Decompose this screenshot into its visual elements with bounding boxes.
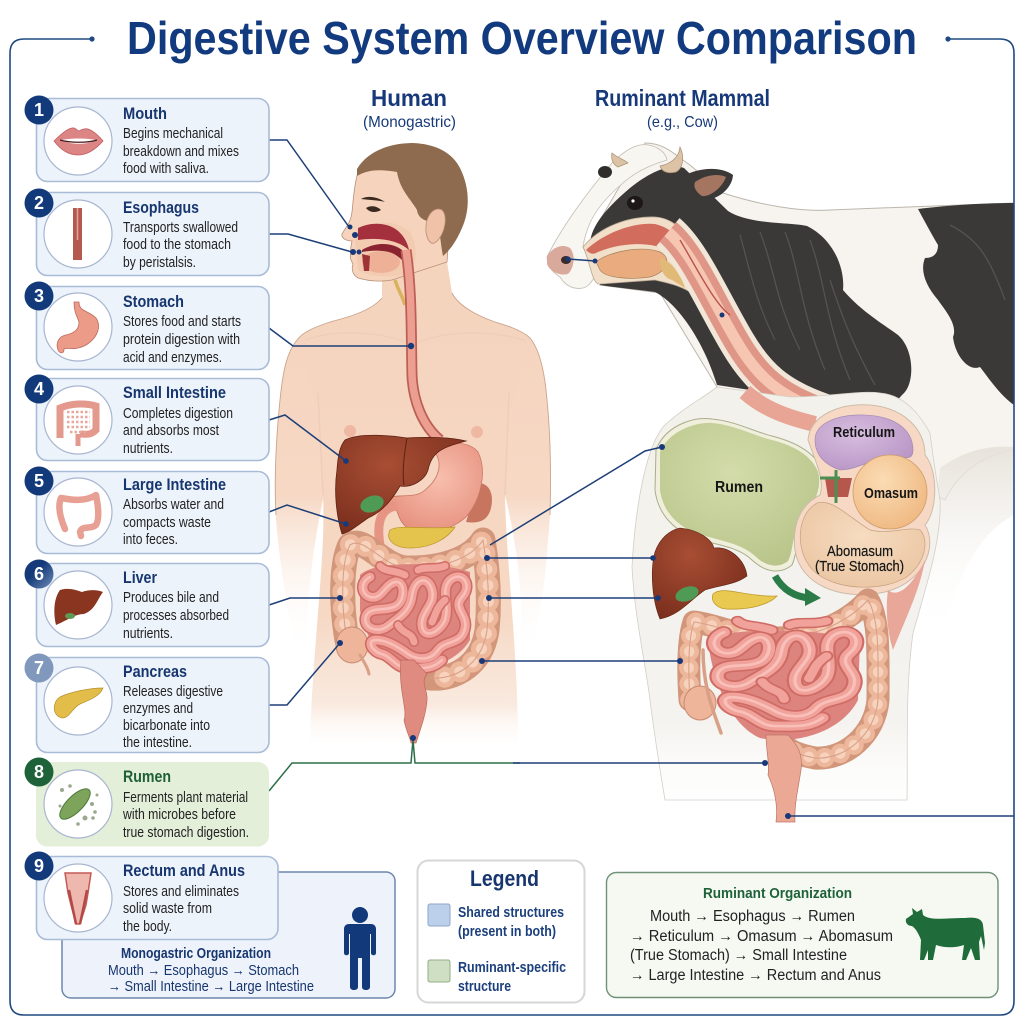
badge 5: 5 bbox=[34, 471, 44, 491]
cow lower liver connector bbox=[489, 597, 658, 599]
badge 9: 9 bbox=[34, 856, 44, 876]
rumen leader extension bbox=[513, 762, 765, 764]
head section bbox=[583, 217, 700, 295]
illustration: human figure bbox=[275, 143, 551, 745]
badge 7 bbox=[24, 654, 54, 682]
ruminant pathway bbox=[630, 908, 893, 984]
left arm bbox=[275, 340, 330, 655]
heading: ruminant bbox=[595, 85, 770, 131]
text: pancreas: enzymes and bbox=[123, 701, 193, 717]
text: rumen bbox=[122, 767, 249, 841]
spleen bbox=[466, 483, 492, 522]
gallbladder bbox=[358, 492, 386, 516]
card: small intestine bbox=[24, 374, 269, 460]
eye and brow bbox=[361, 197, 385, 212]
text: esophagus: Transports swallowed bbox=[123, 220, 238, 236]
hide wrinkles bbox=[740, 225, 1005, 385]
black patch: neck and shoulder bbox=[590, 167, 911, 420]
mouth leader bbox=[269, 140, 349, 227]
icon: stomach bbox=[57, 302, 99, 353]
cow large intestine connector bbox=[482, 660, 680, 662]
small intestine leader bbox=[269, 415, 346, 461]
rumen leader bbox=[269, 740, 520, 791]
icon: pancreas bbox=[54, 688, 103, 718]
badge 4 bbox=[24, 374, 54, 404]
esophagus leader bbox=[269, 234, 352, 252]
oral cavity bbox=[354, 222, 416, 276]
rectum bbox=[400, 660, 427, 743]
pancreas leader bbox=[269, 643, 340, 705]
icon: small intestine bbox=[60, 404, 96, 446]
legend swatch: shared bbox=[428, 904, 450, 926]
cow liver bbox=[652, 528, 747, 619]
ear bbox=[680, 169, 733, 200]
text: rumen: with microbes before bbox=[122, 807, 236, 823]
green flow arrow bbox=[775, 576, 821, 606]
text: large intestine: compacts waste bbox=[123, 515, 211, 531]
text: mouth: food with saliva. bbox=[123, 161, 209, 177]
nose bbox=[547, 246, 574, 275]
small intestine bbox=[360, 564, 470, 669]
badge 6 bbox=[24, 560, 54, 588]
card: esophagus bbox=[24, 188, 269, 276]
small far ear bbox=[598, 166, 612, 178]
ruminant pathway: Mouth → Esophagus → Rumen bbox=[650, 908, 855, 925]
liver bbox=[336, 435, 466, 534]
badge 8: 8 bbox=[34, 762, 44, 782]
icon: microbe bbox=[55, 784, 98, 826]
text: liver: processes absorbed bbox=[123, 608, 229, 624]
heading: ruminant: Ruminant Mammal bbox=[595, 85, 770, 111]
reticulum label: Reticulum bbox=[833, 424, 895, 441]
legend heading: Legend bbox=[470, 866, 539, 891]
monogastric pathway: → Small Intestine → Large Intestine bbox=[108, 978, 314, 995]
cow gallbladder bbox=[673, 583, 701, 605]
rumen bbox=[655, 419, 824, 571]
text: stomach: protein digestion with bbox=[123, 332, 240, 348]
white blaze and muzzle bbox=[547, 145, 667, 288]
ruminant heading: Ruminant Organization bbox=[703, 886, 852, 902]
badge 2 bbox=[24, 188, 54, 218]
text: pancreas: the intestine. bbox=[123, 735, 192, 751]
reticulum bbox=[815, 415, 913, 470]
monogastric pathway: Mouth → Esophagus → Stomach bbox=[108, 962, 299, 979]
cow rumen connector bbox=[490, 447, 662, 545]
omasum bbox=[853, 455, 927, 529]
hind leg fold bbox=[925, 447, 1014, 620]
text: large intestine: into feces. bbox=[123, 532, 178, 548]
text: rectum and anus: solid waste from bbox=[123, 901, 212, 917]
card: liver bbox=[24, 560, 269, 646]
text: large intestine: Large Intestine bbox=[123, 475, 226, 494]
cow mouth connector bbox=[568, 259, 595, 261]
icon: person bbox=[344, 907, 376, 990]
text: small intestine: Completes digestion bbox=[123, 406, 233, 422]
icon: esophagus tube bbox=[73, 208, 82, 260]
text: liver: Liver bbox=[123, 568, 157, 587]
card: rumen bbox=[24, 758, 269, 846]
horns bbox=[612, 147, 683, 173]
text: esophagus: by peristalsis. bbox=[123, 255, 196, 271]
leader lines bbox=[269, 140, 1014, 819]
text: small intestine: and absorbs most bbox=[123, 423, 219, 439]
abomasum: (True Stomach) bbox=[815, 559, 904, 575]
icon: liver bbox=[54, 589, 103, 625]
panel: legend bbox=[418, 860, 584, 1002]
icon: large intestine bbox=[59, 495, 98, 536]
tongue bbox=[596, 249, 667, 278]
body contour and creases bbox=[275, 293, 551, 515]
text: rectum and anus: Stores and eliminates bbox=[123, 884, 239, 900]
legend swatch: ruminant bbox=[428, 960, 450, 982]
badge 8 bbox=[24, 758, 54, 786]
liver leader bbox=[269, 598, 340, 605]
text: liver bbox=[123, 568, 229, 642]
connector dots bbox=[337, 224, 791, 819]
panel: ruminant organization bbox=[606, 872, 998, 998]
eye bbox=[627, 196, 643, 210]
stomach compartments ring bbox=[794, 405, 935, 595]
text: rectum and anus: Rectum and Anus bbox=[123, 861, 245, 880]
legend text: ruminant bbox=[458, 960, 566, 995]
cow rectum bbox=[766, 735, 801, 822]
text: mouth: Mouth bbox=[123, 104, 167, 123]
text: pancreas: bicarbonate into bbox=[123, 718, 210, 734]
icon: lips bbox=[54, 128, 103, 155]
title: Digestive System Overview Comparison bbox=[127, 12, 917, 64]
esophagus band bbox=[668, 232, 825, 412]
text: stomach bbox=[123, 292, 241, 366]
head bbox=[342, 160, 450, 281]
cow pancreas bbox=[712, 591, 777, 609]
ear bbox=[426, 209, 445, 243]
black patch: rear bbox=[918, 203, 1014, 405]
card: stomach bbox=[24, 282, 269, 370]
text: pancreas: Pancreas bbox=[123, 662, 187, 681]
text: stomach: Stores food and starts bbox=[123, 314, 241, 330]
text: esophagus bbox=[123, 198, 238, 271]
badge 2: 2 bbox=[34, 193, 44, 213]
heading: human bbox=[363, 85, 456, 131]
card: rectum and anus bbox=[24, 852, 278, 940]
heading: ruminant: (e.g., Cow) bbox=[647, 114, 718, 131]
legend text: ruminant: structure bbox=[458, 979, 511, 995]
large intestine bbox=[343, 540, 488, 678]
text: mouth: Begins mechanical bbox=[123, 126, 223, 142]
badge 9 bbox=[24, 852, 54, 880]
illustration: cow bbox=[547, 143, 1014, 822]
abomasum labels: Abomasum bbox=[827, 544, 893, 560]
passage between chambers bbox=[820, 470, 852, 503]
icon: rectum bbox=[65, 873, 91, 924]
card: pancreas bbox=[24, 654, 269, 752]
text: esophagus: food to the stomach bbox=[123, 237, 231, 253]
cow upper body bbox=[600, 143, 1014, 500]
right arm bbox=[495, 338, 551, 655]
nostril bbox=[561, 256, 571, 264]
card: large intestine bbox=[24, 466, 269, 554]
icon: cow silhouette bbox=[906, 908, 985, 960]
abomasum bbox=[800, 502, 925, 587]
text: rectum and anus: the body. bbox=[123, 919, 172, 935]
text: rumen: true stomach digestion. bbox=[123, 825, 249, 841]
cow small intestine bbox=[708, 621, 860, 740]
hair bbox=[357, 143, 468, 256]
ruminant pathway: → Large Intestine → Rectum and Anus bbox=[630, 967, 881, 984]
badge 5 bbox=[24, 466, 54, 496]
badge 6: 6 bbox=[34, 564, 44, 584]
monogastric pathway bbox=[108, 962, 314, 995]
badge 3 bbox=[24, 282, 54, 310]
second esophagus segment bbox=[745, 392, 815, 424]
text: small intestine: Small Intestine bbox=[123, 383, 226, 402]
omasum label: Omasum bbox=[864, 485, 918, 502]
badge 4: 4 bbox=[34, 379, 44, 399]
badge 1 bbox=[24, 96, 54, 124]
text: rectum and anus bbox=[123, 861, 245, 935]
text: mouth: breakdown and mixes bbox=[123, 144, 239, 160]
heading: human: Human bbox=[371, 85, 447, 111]
text: stomach: acid and enzymes. bbox=[123, 350, 222, 366]
legend text: shared: Shared structures bbox=[458, 905, 564, 921]
thyroid bbox=[395, 280, 405, 305]
stomach bbox=[385, 443, 482, 532]
badge 7: 7 bbox=[34, 658, 44, 678]
cecum and appendix bbox=[336, 627, 369, 674]
ruminant pathway: → Reticulum → Omasum → Abomasum bbox=[630, 928, 893, 945]
text: liver: Produces bile and bbox=[123, 590, 219, 606]
larynx bbox=[660, 258, 685, 288]
text: pancreas: Releases digestive bbox=[123, 684, 223, 700]
nipples bbox=[344, 425, 483, 438]
legend text: shared: (present in both) bbox=[458, 924, 556, 940]
text: mouth bbox=[123, 104, 239, 177]
panel: monogastric organization bbox=[62, 872, 395, 998]
badge 1: 1 bbox=[34, 100, 44, 120]
large intestine leader bbox=[269, 505, 346, 524]
pancreas bbox=[389, 527, 455, 548]
cow cecum and appendix bbox=[684, 650, 721, 733]
text: large intestine bbox=[123, 475, 226, 548]
duodenum bbox=[379, 506, 396, 545]
cow large intestine bbox=[689, 600, 878, 758]
stomach leader bbox=[269, 328, 411, 346]
cow torso bbox=[632, 387, 940, 800]
monogastric heading: Monogastric Organization bbox=[121, 946, 271, 962]
text: rumen: Rumen bbox=[123, 767, 171, 786]
text: small intestine bbox=[123, 383, 233, 457]
text: pancreas bbox=[123, 662, 223, 751]
heading: human: (Monogastric) bbox=[363, 114, 456, 131]
badge 3: 3 bbox=[34, 286, 44, 306]
text: rumen: Ferments plant material bbox=[123, 790, 248, 806]
torso and neck bbox=[297, 262, 530, 745]
legend text: ruminant: Ruminant-specific bbox=[458, 960, 566, 976]
legend text: shared bbox=[458, 905, 564, 940]
esophagus bbox=[406, 250, 440, 440]
cow liver connector bbox=[487, 557, 653, 559]
text: small intestine: nutrients. bbox=[123, 441, 173, 457]
text: stomach: Stomach bbox=[123, 292, 184, 311]
text: liver: nutrients. bbox=[123, 626, 173, 642]
rumen label: Rumen bbox=[715, 479, 763, 496]
collar shading bbox=[305, 333, 525, 495]
cow rectum connector bbox=[788, 815, 1014, 817]
ruminant pathway: (True Stomach) → Small Intestine bbox=[630, 947, 847, 964]
text: esophagus: Esophagus bbox=[123, 198, 199, 217]
card: mouth bbox=[24, 96, 269, 182]
cow mesentery bbox=[887, 560, 925, 650]
text: large intestine: Absorbs water and bbox=[123, 497, 224, 513]
